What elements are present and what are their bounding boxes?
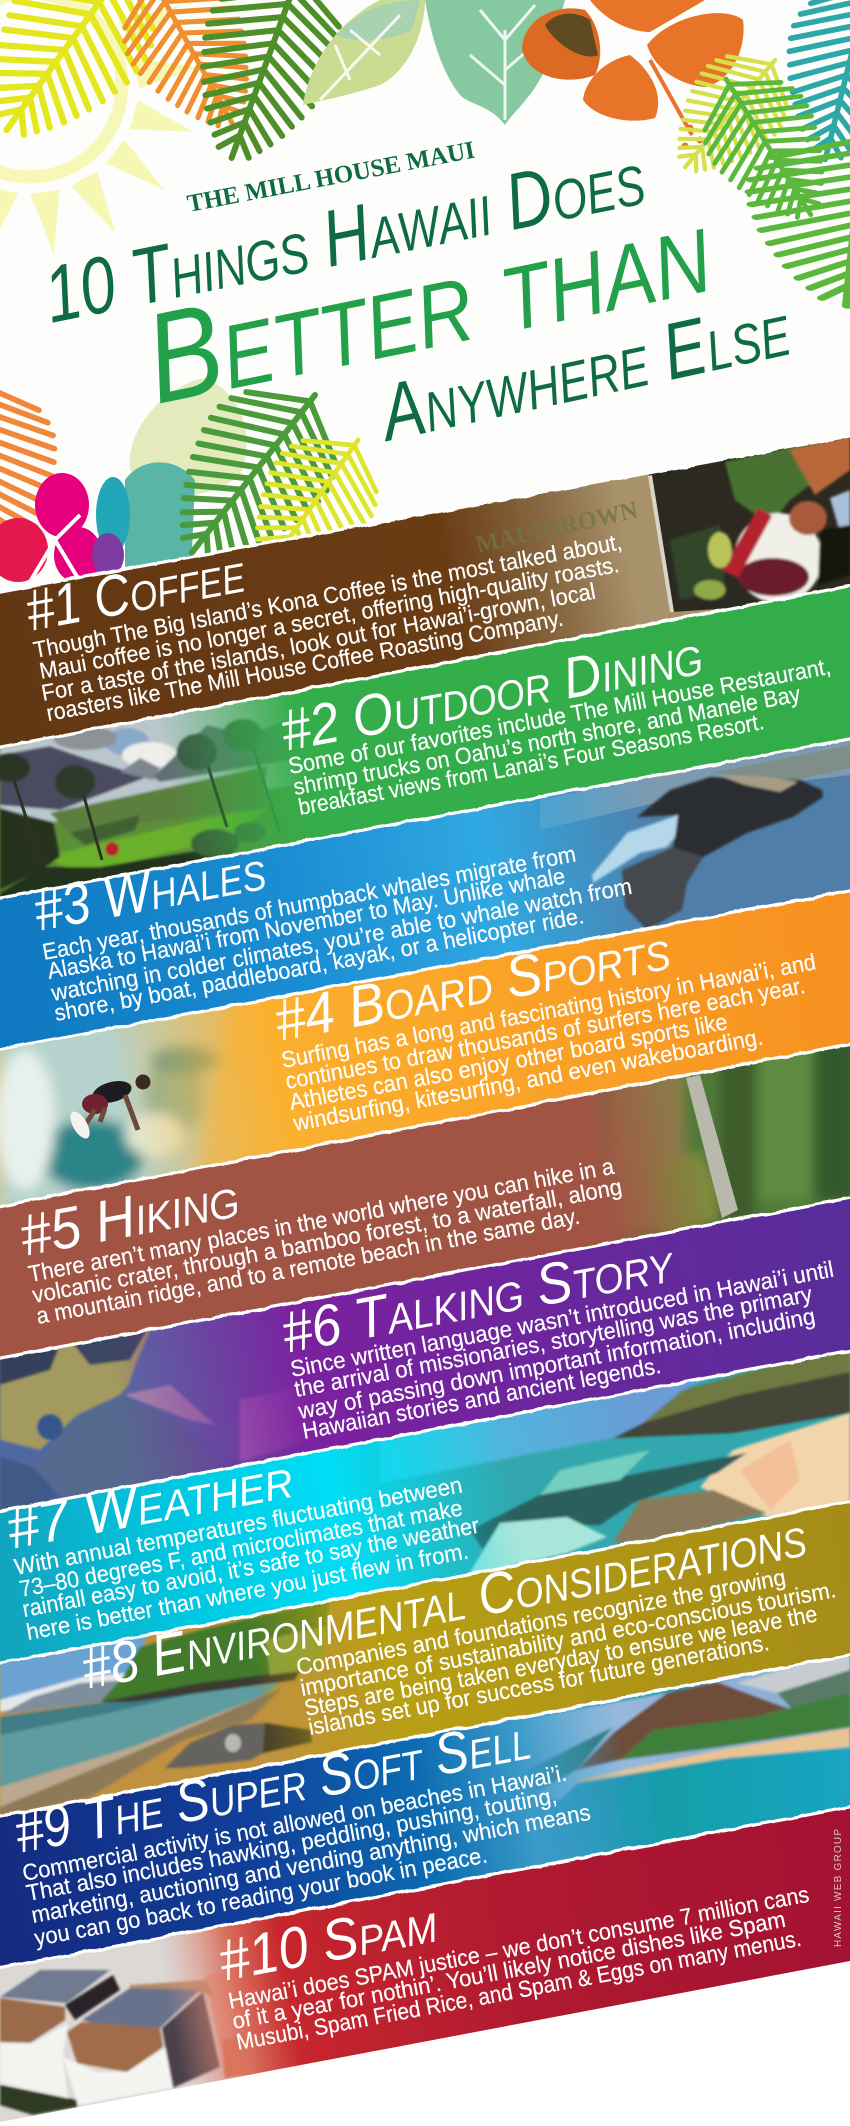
body text: 73–80 degrees F, and microclimates that make (17, 1494, 464, 1602)
body text: Steps are being taken everyday to ensure we leave the (302, 1600, 819, 1721)
photo: bay and crater (0, 1650, 850, 1970)
body text: islands set up for success for future generations. (306, 1629, 771, 1740)
body text: Hawaiian stories and ancient legends. (300, 1352, 663, 1444)
header tropical decoration (0, 0, 850, 602)
subtitle: THE MILL HOUSE MAUI (185, 137, 477, 218)
panel: #5 hiking (0, 1040, 850, 1360)
photo: coffee bag and picking (0, 430, 850, 750)
icon: pale green leaf top (336, 0, 420, 40)
body text: Commercial activity is not allowed on beaches in Hawai’i. (20, 1760, 569, 1886)
body text: Maui coffee is no longer a secret, offering high-quality roasts. (37, 551, 621, 684)
body text: of it a year for nothin’. You’ll likely notice dishes like Spam (230, 1906, 788, 2034)
body text: you can go back to reading your book in peace. (32, 1842, 489, 1951)
heading: #5 Hiking (15, 1165, 244, 1269)
panel: #3 whales (0, 735, 850, 1055)
body text: Companies and foundations recognize the growing (294, 1564, 788, 1680)
body text: Musubi, Spam Fried Rice, and Spam & Eggs on many menus. (234, 1925, 803, 2055)
body text (31, 528, 624, 726)
photo: spam musubi (0, 1800, 850, 2125)
body text: here is better than where you just flew in from. (24, 1538, 470, 1645)
icon: pale sun (0, 0, 201, 255)
heading: #2 Outdoor Dining (276, 622, 707, 764)
icon: pale monstera leaf (303, 0, 425, 105)
body text: For a taste of the islands, look out for Hawai’i-grown, local (39, 578, 597, 706)
body text: breakfast views from Lanai’s Four Seasons Resort. (296, 708, 766, 820)
icon: green frond lower left (138, 353, 369, 594)
body text: Since written language wasn’t introduced in Hawai’i until (288, 1256, 836, 1382)
title line 2: Better than (134, 177, 722, 431)
body text (12, 1471, 481, 1645)
icon: orange hibiscus (522, 0, 744, 121)
photo: lava rock (0, 1195, 850, 1515)
body text: volcanic crater, through a bamboo forest, to a waterfall, along (30, 1173, 624, 1308)
icon: green frond right (739, 121, 850, 317)
photo: beach (0, 1345, 850, 1665)
icon: pink hibiscus (0, 473, 130, 590)
body text: rainfall easy to avoid, it’s safe to say the weather (20, 1512, 481, 1622)
heading: #7 Weather (2, 1445, 298, 1562)
photo: breaching whale (0, 735, 850, 1055)
body text: continues to draw thousands of surfers here each year. (283, 972, 807, 1094)
body text: That also includes hawking, peddling, pushing, touting, (24, 1782, 559, 1906)
heading: #1 Coffee (21, 539, 250, 644)
title line 1: 10 Things Hawaii Does (37, 132, 651, 340)
body text: Athletes can also enjoy other board sports like (287, 1008, 729, 1115)
body text: Though The Big Island’s Kona Coffee is the most talked about, (31, 528, 624, 663)
heading: #10 Spam (214, 1890, 442, 1994)
panel: #8 environmental considerations (0, 1495, 850, 1820)
body text: watching in colder climates, you’re able to whale watch from (48, 873, 634, 1006)
body text: There aren’t many places in the world where you can hike in a (26, 1153, 616, 1287)
icon: teal frond (764, 0, 850, 175)
body text: roasters like The Mill House Coffee Roasting Company. (44, 605, 565, 726)
body text (279, 948, 818, 1136)
panel: #10 spam (0, 1800, 850, 2125)
body text: marketing, auctioning and vending anything, which means (29, 1799, 592, 1928)
body text (288, 1256, 836, 1444)
body text (20, 1760, 592, 1951)
panel: #7 weather (0, 1345, 850, 1665)
body text: windsurfing, kitesurfing, and even wakeboarding. (290, 1023, 765, 1136)
heading: #4 Board Sports (270, 917, 675, 1054)
icon: yellow palm frond (0, 0, 188, 172)
icon: orange frond lower left (0, 371, 66, 574)
panel: #2 outdoor dining (0, 580, 850, 900)
coffee bag label: MAUIGROWN (473, 497, 640, 559)
body text: shrimp trucks on Oahu’s north shore, and Manele Bay (291, 680, 803, 800)
body text: the arrival of missionaries, storytelling was the primary (292, 1280, 815, 1402)
body text: With annual temperatures fluctuating between (12, 1471, 464, 1580)
icon: hibiscus stamen (650, 60, 704, 150)
body text: a mountain ridge, and to a remote beach in the same day. (34, 1203, 582, 1329)
icon: green palm frond (168, 0, 364, 181)
body text: Some of our favorites include The Mill House Restaurant, (286, 653, 833, 779)
icon: pale leaf lower left (130, 378, 247, 495)
panel: #9 the super soft sell (0, 1650, 850, 1970)
panel: #1 coffee (0, 430, 850, 750)
body text: Alaska to Hawai’i from November to May. Unlike whale (45, 862, 567, 984)
heading: #3 Whales (29, 837, 270, 944)
icon: yellow frond right (649, 29, 811, 198)
body text: Hawai’i does SPAM justice – we don’t consume 7 million cans (226, 1881, 811, 2014)
heading: #9 The Super Soft Sell (10, 1707, 536, 1866)
icon: teal leaf lower left (125, 462, 195, 600)
photo: surfer (0, 885, 850, 1210)
icon: teal leaf (425, 0, 565, 125)
icon: orange palm frond (99, 0, 283, 152)
body text: way of passing down important information, including (295, 1303, 817, 1424)
body text: Each year, thousands of humpback whales migrate from (40, 841, 578, 965)
panel: #6 talking story (0, 1195, 850, 1515)
photo: green valley (0, 580, 850, 900)
photo: waterfall (0, 1040, 850, 1360)
leaf veins (320, 5, 540, 120)
credit: HAWAII WEB GROUP (833, 1829, 844, 1947)
panel: #4 board sports (0, 885, 850, 1210)
header background (0, 0, 850, 640)
heading: #6 Talking Story (277, 1229, 680, 1366)
body text: importance of sustainability and eco-conscious tourism. (298, 1576, 838, 1701)
palm trees (13, 747, 280, 867)
body text: shore, by boat, paddleboard, kayak, or a helicopter ride. (52, 902, 586, 1026)
icon: yellow frond lower left (222, 409, 403, 602)
body text: Surfing has a long and fascinating history in Hawai’i, and (279, 948, 818, 1073)
photo: monk seal on beach (0, 1495, 850, 1820)
icon: green frond upper right (680, 50, 850, 244)
